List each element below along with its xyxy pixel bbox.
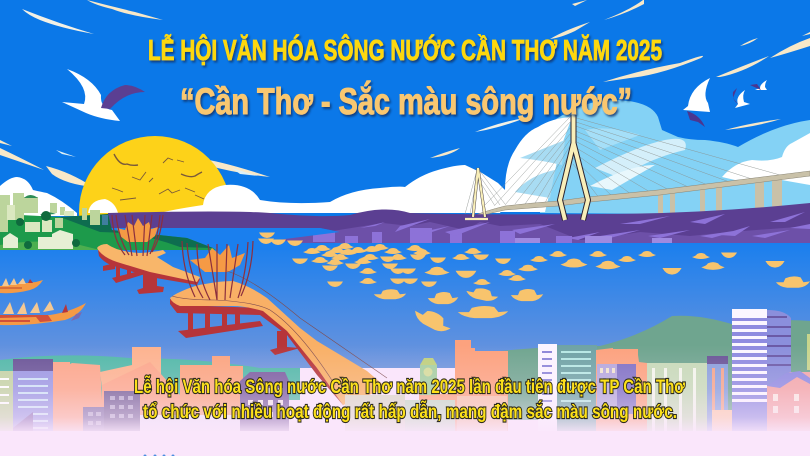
water behind the lotus bridge (100, 228, 340, 250)
sky background (0, 0, 810, 260)
main pylon outline (560, 115, 588, 220)
intro text block: tổ chức với nhiều hoạt động rất hấp dẫn, mang đậm sắc màu sông nước. (143, 401, 677, 423)
water (0, 243, 810, 368)
lotus ribs 1 (112, 215, 163, 256)
lower deck supports (170, 299, 350, 405)
sun (79, 136, 231, 288)
pale fade over skyline (0, 345, 810, 433)
wispy cream clouds (0, 0, 810, 187)
deck cable lines (172, 271, 387, 385)
gull large left (62, 69, 145, 121)
lotus flower 1 (117, 218, 158, 242)
lotus flower 2 (190, 245, 245, 272)
two small gulls (733, 80, 767, 108)
deck (470, 171, 810, 219)
fleet of golden boats (258, 232, 810, 336)
upper deck (97, 244, 200, 282)
skyline: left buildings (0, 347, 289, 431)
small pylon outline (473, 168, 485, 217)
subtitle: “Cần Thơ - Sắc màu sông nước” (180, 80, 632, 122)
lavender rooftops on far shore (277, 212, 810, 243)
green hillside town (0, 193, 216, 250)
skyline: central and right buildings (345, 309, 810, 431)
cable-stayed bridge (465, 117, 810, 219)
upper deck supports (98, 250, 200, 294)
bridge pylons (465, 115, 588, 220)
intro text block: Lễ hội Văn hóa Sông nước Cần Thơ năm 2025 lần đầu tiên được TP Cần Thơ (134, 376, 685, 398)
lower deck (170, 281, 387, 405)
lotus ribs 2 (182, 241, 253, 300)
intro text block (134, 376, 685, 423)
small pylon fill (465, 168, 488, 219)
pale footer band (0, 431, 810, 456)
footer dots (144, 454, 174, 456)
dragon boats (0, 278, 86, 325)
main pylon fill (560, 115, 588, 220)
cables (465, 117, 780, 214)
deck piers (658, 179, 782, 214)
cloud shading on the bank (515, 128, 686, 198)
birds over the sun (112, 154, 204, 200)
purple far shore (108, 203, 810, 243)
white clouds along the horizon (0, 117, 810, 216)
lotus bridge (97, 215, 387, 405)
light blue cloud bank behind the bridge (540, 100, 810, 215)
skyline: distant hills (0, 316, 810, 420)
gull right (683, 78, 710, 127)
